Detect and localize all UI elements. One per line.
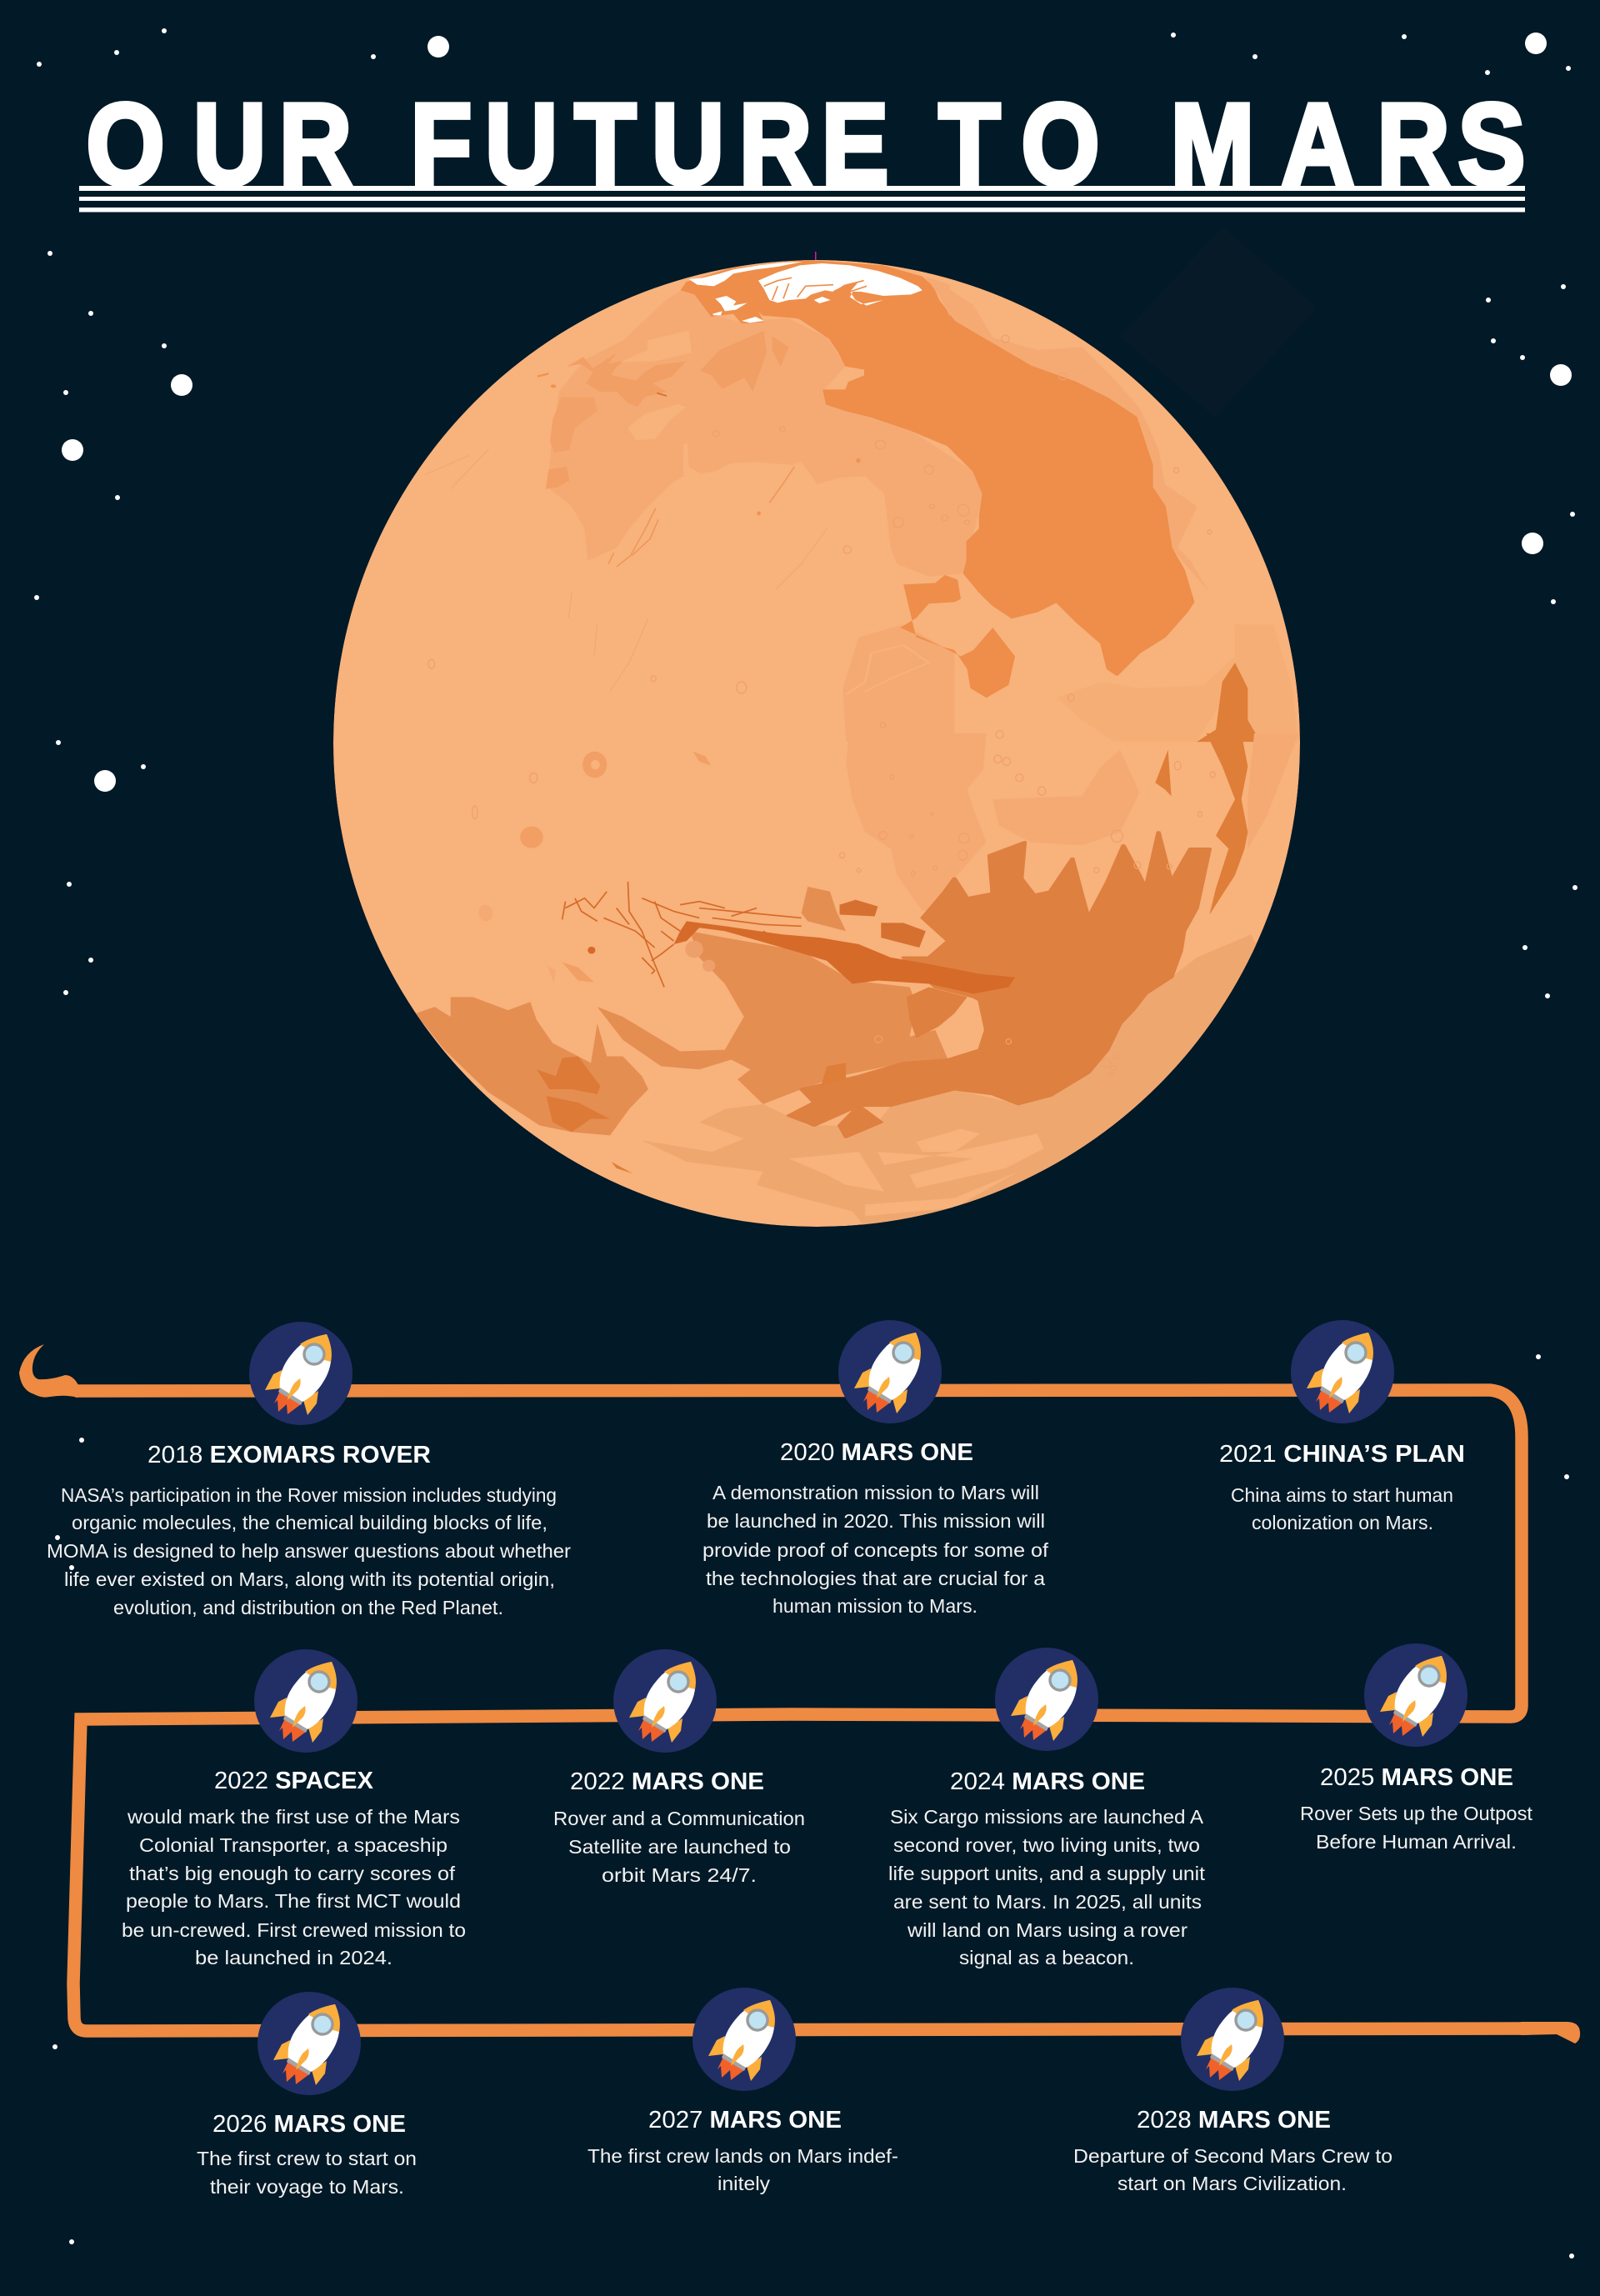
milestone: 2027 Mars One: 2027 MARS ONE <box>648 2107 842 2133</box>
milestone: 2020 Mars One: provide proof of concepts for some of <box>702 1539 1049 1561</box>
polar ice cap <box>681 260 950 342</box>
icon: rocket <box>838 1320 942 1423</box>
milestone: 2024 Mars One: 2024 MARS ONE <box>950 1768 1145 1795</box>
Hellas west patch <box>416 997 648 1135</box>
milestone: 2024 Mars One: life support units, and a supply unit <box>888 1863 1206 1884</box>
milestone: 2027 Mars One: The first crew lands on Mars indef- <box>588 2145 898 2167</box>
east dark strip <box>1197 663 1261 742</box>
path start hook <box>19 1344 78 1398</box>
dark basin <box>758 300 1195 677</box>
icon: rocket <box>613 1649 717 1753</box>
milestone: 2020 Mars One <box>702 1320 1049 1617</box>
milestone: 2022 SpaceX: people to Mars. The first MCT would <box>126 1890 461 1912</box>
milestone: 2020 Mars One: human mission to Mars. <box>772 1595 978 1617</box>
milestone: 2025 Mars One: Before Human Arrival. <box>1316 1831 1517 1853</box>
icon: rocket <box>249 1322 352 1425</box>
milestone: 2020 Mars One: 2020 MARS ONE <box>780 1439 973 1466</box>
milestone: 2018 ExoMars Rover <box>47 1322 571 1618</box>
milestone: 2022 Mars One: orbit Mars 24/7. <box>602 1864 757 1886</box>
main valley <box>674 921 1015 993</box>
milestone: 2026 Mars One: their voyage to Mars. <box>210 2176 404 2198</box>
lower dark patch <box>900 575 1015 698</box>
plains <box>598 931 948 1104</box>
milestone: 2028 Mars One: Departure of Second Mars Crew to <box>1073 2145 1392 2167</box>
milestone: 2018 ExoMars Rover: NASA’s participation in the Rover mission includes studying <box>61 1484 557 1506</box>
branching network <box>562 882 802 987</box>
milestone: 2028 Mars One: start on Mars Civilization. <box>1118 2173 1347 2194</box>
milestone: 2025 Mars One: 2025 MARS ONE <box>1320 1764 1513 1791</box>
icon: rocket <box>692 1988 796 2091</box>
milestone: 2028 Mars One <box>1073 1988 1392 2194</box>
icon: rocket <box>258 1992 361 2095</box>
icon: rocket <box>254 1649 358 1753</box>
icon: rocket <box>1181 1988 1284 2091</box>
milestone: 2022 SpaceX: be un-crewed. First crewed mission to <box>122 1919 466 1941</box>
milestone: 2026 Mars One <box>197 1992 417 2198</box>
east dark strip <box>1207 733 1248 914</box>
milestone: 2021 China's Plan <box>1219 1320 1465 1533</box>
milestone: 2028 Mars One: 2028 MARS ONE <box>1137 2107 1331 2133</box>
milestone: 2021 China's Plan: China aims to start human <box>1231 1484 1453 1506</box>
milestone: 2020 Mars One: be launched in 2020. This mission will <box>707 1510 1045 1532</box>
title: OUR FUTURE TO MARS <box>87 79 1525 209</box>
icon: rocket <box>995 1648 1098 1751</box>
mid highlands <box>846 733 987 912</box>
milestone: 2020 Mars One: the technologies that are crucial for a <box>706 1568 1045 1589</box>
milestone: 2021 China's Plan: 2021 CHINA’S PLAN <box>1219 1441 1465 1468</box>
milestone: 2022 SpaceX: 2022 SPACEX <box>214 1768 374 1794</box>
milestone: 2022 Mars One <box>553 1649 805 1886</box>
milestone: 2026 Mars One: 2026 MARS ONE <box>212 2111 406 2138</box>
milestone: 2018 ExoMars Rover: life ever existed on Mars, along with its potential origin, <box>64 1568 555 1590</box>
milestone: 2018 ExoMars Rover: organic molecules, the chemical building blocks of life, <box>72 1512 548 1533</box>
milestone: 2024 Mars One: signal as a beacon. <box>959 1947 1134 1968</box>
milestone: 2022 SpaceX <box>122 1649 466 1968</box>
southern dark basin <box>788 833 1209 1137</box>
milestone: 2025 Mars One <box>1300 1643 1533 1853</box>
milestone: 2022 Mars One: Satellite are launched to <box>568 1836 791 1858</box>
milestone: 2022 SpaceX: Colonial Transporter, a spaceship <box>139 1834 448 1856</box>
milestone: 2021 China's Plan: colonization on Mars. <box>1252 1512 1433 1533</box>
southern highlands <box>642 934 1267 1228</box>
milestone: 2024 Mars One: are sent to Mars. In 2025, all units <box>893 1891 1202 1913</box>
milestone: 2024 Mars One: will land on Mars using a rover <box>907 1919 1188 1941</box>
milestone: 2027 Mars One <box>588 1988 898 2194</box>
tributary blocks <box>802 887 846 931</box>
icon: rocket <box>1364 1643 1468 1747</box>
milestone: 2018 ExoMars Rover: evolution, and distribution on the Red Planet. <box>113 1597 503 1618</box>
planet: Mars <box>333 260 1300 1228</box>
registration tick <box>815 252 817 260</box>
milestone: 2020 Mars One: A demonstration mission to Mars will <box>712 1482 1039 1503</box>
timeline path <box>19 1344 1580 2043</box>
milestone: 2022 Mars One: Rover and a Communication <box>553 1808 805 1829</box>
milestone: 2025 Mars One: Rover Sets up the Outpost <box>1300 1803 1533 1824</box>
milestone: 2026 Mars One: The first crew to start on <box>197 2148 417 2169</box>
craters <box>472 755 1215 1077</box>
milestone: 2022 SpaceX: that’s big enough to carry scores of <box>129 1863 456 1884</box>
milestone: 2024 Mars One <box>888 1648 1206 1968</box>
faint diamond <box>1120 227 1318 418</box>
milestone: 2024 Mars One: second rover, two living units, two <box>893 1834 1200 1856</box>
milestone: 2027 Mars One: initely <box>718 2173 771 2194</box>
milestone: 2022 SpaceX: be launched in 2024. <box>195 1947 392 1968</box>
milestone: 2018 ExoMars Rover: MOMA is designed to help answer questions about whether <box>47 1540 571 1562</box>
milestone: 2022 Mars One: 2022 MARS ONE <box>570 1768 764 1795</box>
milestone: 2018 ExoMars Rover: 2018 EXOMARS ROVER <box>148 1442 431 1468</box>
milestone: 2022 SpaceX: would mark the first use of the Mars <box>127 1806 460 1828</box>
craters <box>425 335 1212 738</box>
path end flare <box>1521 2022 1580 2043</box>
milestone: 2024 Mars One: Six Cargo missions are launched A <box>890 1806 1204 1828</box>
icon: rocket <box>1291 1320 1394 1423</box>
northern highland detail <box>538 331 861 567</box>
